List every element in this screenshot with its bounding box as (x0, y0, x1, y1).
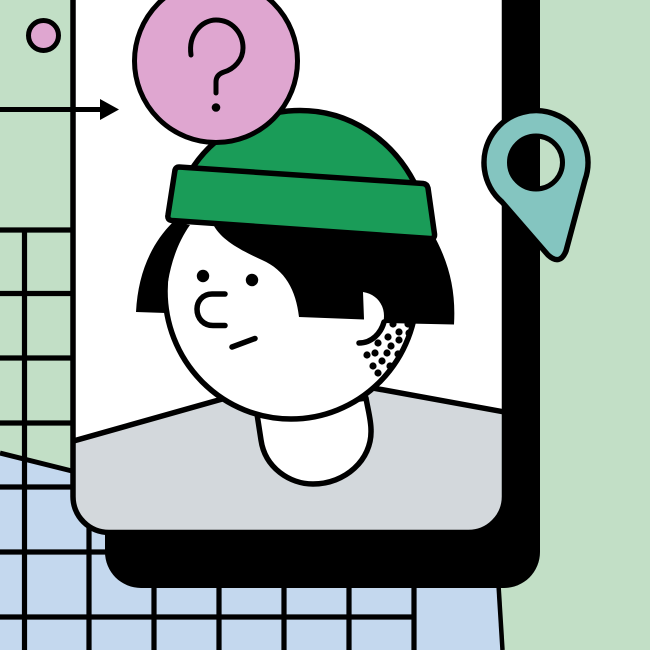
mouth (232, 338, 255, 347)
hair (136, 222, 454, 324)
small pink dot (28, 20, 58, 50)
person (136, 110, 454, 484)
question mark bubble (134, 0, 298, 142)
hat dome (190, 110, 418, 190)
stubble (363, 320, 413, 377)
ear (359, 292, 384, 343)
phone shadow (105, 0, 540, 588)
background grid (0, 230, 414, 650)
arrow (0, 99, 119, 120)
hat band (168, 167, 435, 239)
neck (257, 398, 371, 484)
shirt (70, 386, 510, 540)
nose (197, 294, 225, 326)
eyes (197, 270, 258, 286)
question mark (191, 20, 243, 112)
phone screen (70, 0, 510, 540)
blue floor panel (0, 453, 503, 650)
location pin (484, 111, 588, 260)
head (165, 163, 417, 419)
